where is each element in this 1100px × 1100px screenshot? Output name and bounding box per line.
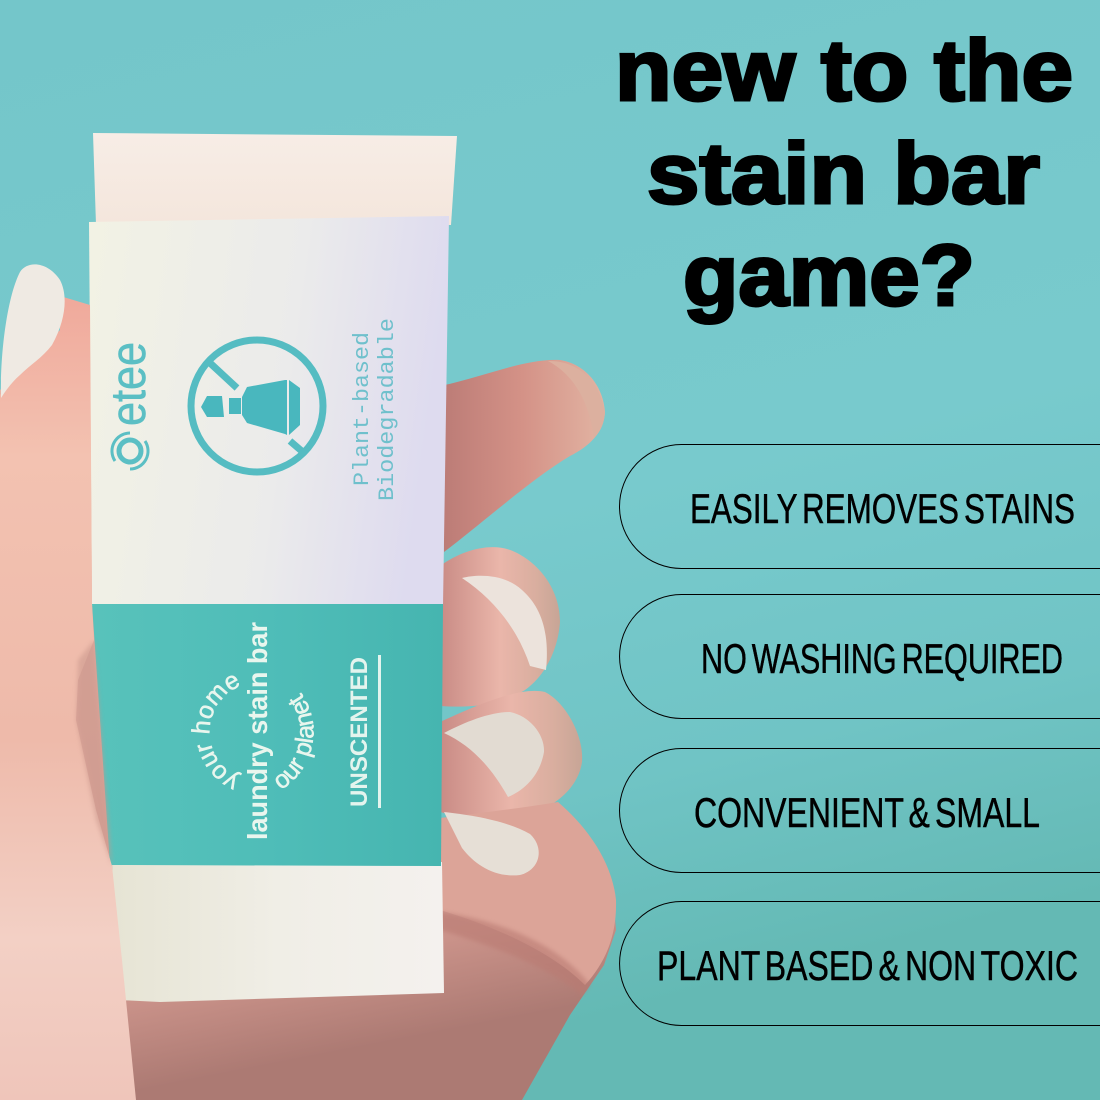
laundry stain bar circular wordmark: our planet (276, 692, 316, 788)
shadow between thumb and bar (76, 640, 112, 866)
soap bar bottom (112, 862, 444, 1002)
etee logo (102, 342, 156, 469)
icon: no-perfume symbol (191, 340, 323, 472)
laundry stain bar circular wordmark: your home (190, 676, 242, 790)
ring fingernail (444, 712, 544, 797)
laundry stain bar circular wordmark (190, 622, 316, 840)
stain bar product (89, 133, 457, 1002)
plant-based text: Biodegradable (375, 318, 400, 501)
heading: new to the (615, 23, 1073, 119)
crease shading (440, 912, 590, 995)
benefit pill: convenient and small (619, 748, 1100, 872)
plant-based text: Plant-based (350, 332, 375, 486)
unscented label: UNSCENTED (346, 657, 373, 807)
thumb skin (0, 296, 136, 1100)
laundry stain bar circular wordmark: laundry stain bar (242, 622, 273, 840)
ring finger (440, 691, 582, 819)
palm and lower hand (0, 300, 616, 1100)
index fingernail (548, 361, 605, 438)
benefit pill: easily removes stains (619, 444, 1100, 568)
middle finger (440, 547, 560, 707)
paper sleeve (89, 216, 449, 606)
heading (615, 23, 1073, 324)
middle fingernail (462, 576, 547, 670)
teal label band (92, 604, 443, 866)
plant-based text (350, 318, 400, 501)
benefit pill: no washing required (620, 594, 1100, 718)
index finger (440, 360, 605, 552)
thumb and palm in front of the bar (0, 264, 136, 1100)
heading: stain bar (647, 126, 1040, 222)
hand behind the bar (0, 300, 616, 1100)
little finger (440, 802, 616, 985)
little fingernail (444, 812, 539, 875)
thumbnail (1, 264, 65, 398)
benefit pill: plant based and non toxic (620, 902, 1100, 1026)
soap bar top (93, 133, 457, 225)
heading: game? (683, 228, 975, 324)
etee logo: etee (102, 342, 156, 426)
